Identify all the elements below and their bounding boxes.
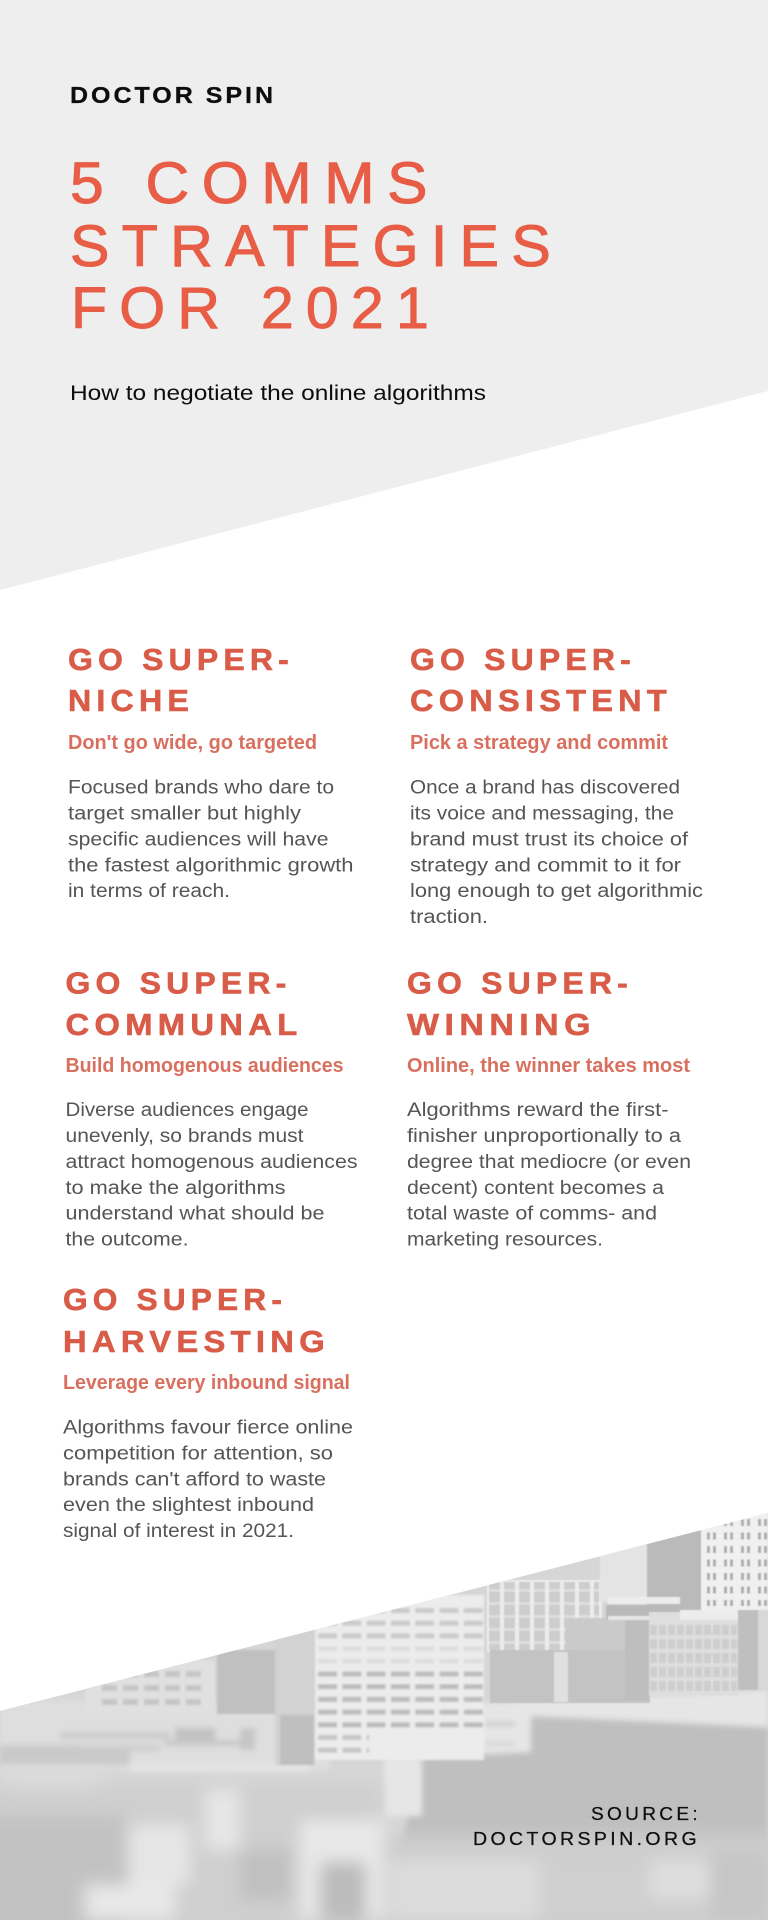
title: FOR 2021 xyxy=(71,276,441,341)
subheading: Online, the winner takes most xyxy=(407,1055,690,1077)
striped mid tower xyxy=(487,1580,602,1652)
heading xyxy=(63,1282,330,1359)
heading xyxy=(66,966,302,1042)
body text xyxy=(63,1416,353,1542)
dark low blocks xyxy=(490,1650,650,1703)
source credit: DOCTORSPIN.ORG xyxy=(473,1828,700,1849)
mid-ground buildings xyxy=(0,1690,768,1850)
body text: marketing resources. xyxy=(407,1228,603,1250)
body text xyxy=(410,776,703,928)
blurred foreground buildings xyxy=(0,1792,768,1920)
body text: brand must trust its choice of xyxy=(410,828,689,850)
body text xyxy=(407,1099,691,1250)
body text: target smaller but highly xyxy=(68,802,301,824)
title xyxy=(70,151,563,341)
title: 5 COMMS xyxy=(70,151,440,216)
body text: unevenly, so brands must xyxy=(66,1125,304,1147)
body text: its voice and messaging, the xyxy=(410,802,674,824)
body text: even the slightest inbound xyxy=(63,1494,314,1516)
body text: signal of interest in 2021. xyxy=(63,1520,294,1542)
body text: degree that mediocre (or even xyxy=(407,1151,691,1173)
heading xyxy=(410,642,672,718)
windowed low building xyxy=(648,1612,722,1696)
header background shape xyxy=(0,0,768,590)
white tower xyxy=(701,1505,768,1613)
heading: NICHE xyxy=(68,683,194,718)
panel: go super-harvesting xyxy=(63,1282,353,1542)
heading: GO SUPER- xyxy=(407,966,633,1000)
body text: long enough to get algorithmic xyxy=(410,880,703,902)
panel: go super-communal xyxy=(66,966,358,1250)
heading: GO SUPER- xyxy=(410,642,636,677)
body text: traction. xyxy=(410,906,488,928)
left skyline, soft focus xyxy=(85,1595,484,1765)
text layer xyxy=(63,82,703,1849)
body text: in terms of reach. xyxy=(68,880,230,902)
heading: COMMUNAL xyxy=(66,1007,302,1042)
subheading: Leverage every inbound signal xyxy=(63,1372,350,1394)
heading xyxy=(68,642,294,718)
source credit: SOURCE: xyxy=(591,1803,701,1824)
panel: go super-winning xyxy=(407,966,691,1250)
heading xyxy=(407,966,633,1042)
body text: to make the algorithms xyxy=(66,1177,286,1199)
body text: competition for attention, so xyxy=(63,1442,333,1464)
body text: Focused brands who dare to xyxy=(68,776,334,798)
sharp upper skyline xyxy=(487,1505,768,1703)
subheading: Pick a strategy and commit xyxy=(410,732,668,754)
brand name: DOCTOR SPIN xyxy=(70,82,276,108)
body text: Algorithms favour fierce online xyxy=(63,1416,353,1438)
dark tower xyxy=(647,1530,701,1612)
heading: WINNING xyxy=(407,1007,596,1042)
central office tower xyxy=(315,1595,484,1760)
title: STRATEGIES xyxy=(70,214,563,279)
body text: strategy and commit to it for xyxy=(410,854,682,876)
subheading: Don't go wide, go targeted xyxy=(68,732,317,754)
cityscape photo band xyxy=(0,1500,768,1920)
panel: go super-niche xyxy=(68,642,354,902)
subheading: Build homogenous audiences xyxy=(66,1055,344,1077)
body text: total waste of comms- and xyxy=(407,1202,657,1224)
body text: the fastest algorithmic growth xyxy=(68,854,354,876)
body text: finisher unproportionally to a xyxy=(407,1125,681,1147)
body text: the outcome. xyxy=(66,1228,188,1250)
body text: understand what should be xyxy=(66,1202,325,1224)
body text: brands can't afford to waste xyxy=(63,1468,326,1490)
heading: GO SUPER- xyxy=(68,642,294,677)
heading: HARVESTING xyxy=(63,1324,330,1359)
body text: Diverse audiences engage xyxy=(66,1099,309,1121)
heading: GO SUPER- xyxy=(66,966,292,1000)
sky gap xyxy=(600,1544,647,1602)
heading: CONSISTENT xyxy=(410,683,672,718)
body text: Algorithms reward the first- xyxy=(407,1099,668,1121)
source credit xyxy=(473,1803,701,1849)
body text: specific audiences will have xyxy=(68,828,329,850)
body text: attract homogenous audiences xyxy=(66,1151,358,1173)
heading: GO SUPER- xyxy=(63,1282,287,1317)
body text: Once a brand has discovered xyxy=(410,776,680,798)
body text: decent) content becomes a xyxy=(407,1177,664,1199)
body text xyxy=(68,776,354,902)
body text xyxy=(66,1099,358,1250)
subtitle: How to negotiate the online algorithms xyxy=(70,381,486,405)
panel: go super-consistent xyxy=(410,642,703,928)
